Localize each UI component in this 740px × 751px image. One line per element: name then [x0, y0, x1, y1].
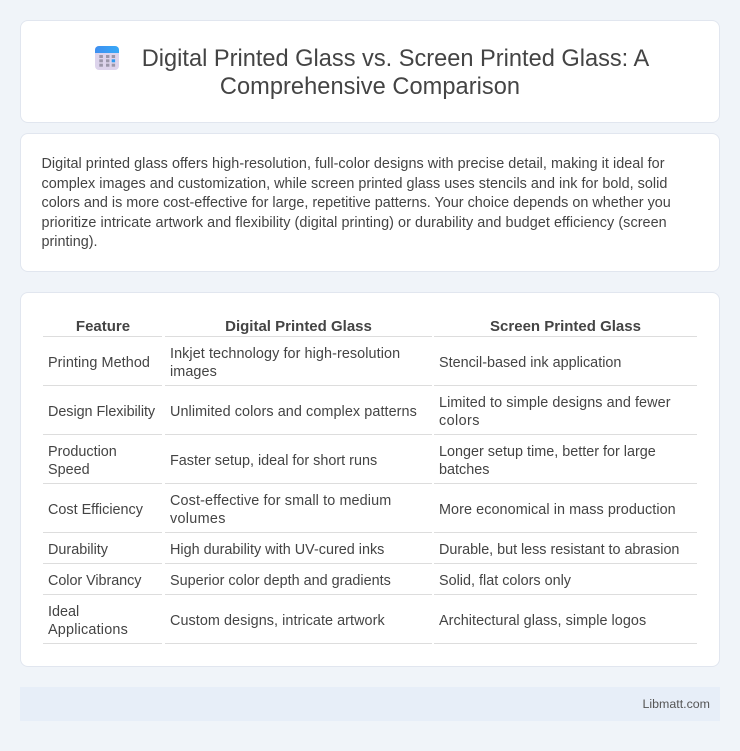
table header row: Screen Printed Glass [490, 318, 641, 334]
table body rows: colors [439, 413, 480, 429]
icon: calendar grid [95, 46, 119, 70]
intro paragraph: Digital printed glass offers high-resolution, full-color designs with precise detail, making it ideal for [42, 156, 665, 172]
table body rows: Applications [48, 622, 128, 638]
table body rows: images [170, 364, 217, 380]
intro paragraph: prioritize intricate artwork and flexibility (digital printing) or durability and budget efficiency (screen [42, 214, 667, 230]
table body rows: High durability with UV-cured inks [170, 542, 384, 558]
footer credit: Libmatt.com [643, 697, 710, 711]
table body rows: More economical in mass production [439, 502, 676, 518]
title: Comprehensive Comparison [220, 74, 520, 100]
table body rows: Design Flexibility [48, 404, 155, 420]
table body rows: Inkjet technology for high-resolution [170, 346, 400, 362]
table body rows: Longer setup time, better for large [439, 444, 656, 460]
comparison table [43, 318, 697, 644]
table body rows: Architectural glass, simple logos [439, 613, 646, 629]
table body rows: Production [48, 444, 117, 460]
footer bar [20, 687, 720, 721]
table body rows: Durability [48, 542, 108, 558]
table body rows: Printing Method [48, 355, 150, 371]
intro paragraph: colors and is more cost-effective for large, repetitive patterns. Your choice depends on whether you [42, 195, 671, 211]
table body rows: volumes [170, 511, 226, 527]
table body rows: Custom designs, intricate artwork [170, 613, 385, 629]
table body rows: Limited to simple designs and fewer [439, 395, 671, 411]
header panel [20, 20, 720, 123]
title: Digital Printed Glass vs. Screen Printed Glass: A [142, 46, 649, 72]
intro paragraph: printing). [42, 234, 98, 250]
table header row: Feature [76, 318, 130, 334]
table body rows: Speed [48, 462, 90, 478]
table body rows: Ideal [48, 604, 79, 620]
intro text panel [20, 133, 720, 272]
intro paragraph: complex images and customization, while screen printed glass uses stencils and ink for bold, solid [42, 176, 667, 192]
table body rows: Superior color depth and gradients [170, 573, 391, 589]
comparison table panel [20, 292, 720, 667]
table body rows: Solid, flat colors only [439, 573, 571, 589]
intro paragraph [42, 156, 671, 250]
table header row [43, 318, 697, 337]
table body rows: Faster setup, ideal for short runs [170, 453, 377, 469]
table body rows: Durable, but less resistant to abrasion [439, 542, 679, 558]
table body rows: batches [439, 462, 489, 478]
table body rows: Color Vibrancy [48, 573, 141, 589]
table body rows: Cost Efficiency [48, 502, 143, 518]
table header row: Digital Printed Glass [225, 318, 372, 334]
table body rows: Unlimited colors and complex patterns [170, 404, 417, 420]
table body rows: Stencil-based ink application [439, 355, 621, 371]
title [142, 46, 650, 100]
table body rows: Cost-effective for small to medium [170, 493, 391, 509]
